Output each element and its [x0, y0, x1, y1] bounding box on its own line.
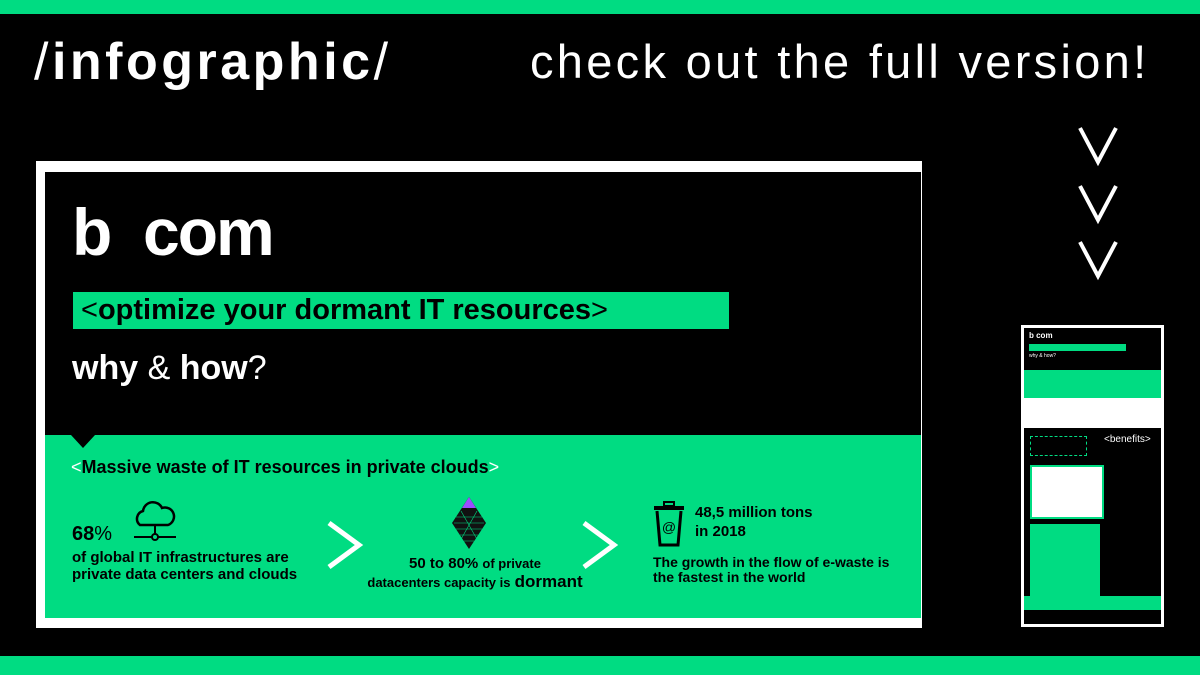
arrow 1 — [328, 521, 364, 569]
thumbnail: full infographic preview: why & how? — [1029, 353, 1056, 359]
heading: /infographic/: /infographic/ — [34, 33, 392, 91]
stat 3: e-waste: in 2018 — [695, 523, 746, 540]
stat 2: 50 to 80%: datacenters capacity is dormant — [367, 572, 583, 591]
thumbnail: full infographic preview — [1021, 325, 1164, 627]
icon: down chevrons — [1078, 127, 1118, 280]
arrow 2 — [582, 521, 618, 569]
stat 3: e-waste — [653, 501, 889, 585]
thumbnail: full infographic preview: b com — [1029, 331, 1053, 340]
panel: green stats section — [45, 435, 921, 618]
panel: infographic preview card — [36, 161, 922, 628]
title banner: <optimize your dormant IT resources> — [81, 294, 608, 326]
bottom green bar — [0, 656, 1200, 675]
icon: trash bin: @ — [662, 519, 676, 535]
heading: check out the full version: check out the full version! — [530, 35, 1149, 88]
thumbnail: full infographic preview: <benefits> — [1104, 434, 1151, 445]
stat 2: 50 to 80%: 50 to 80% of private — [409, 555, 541, 572]
section heading: <Massive waste of IT resources in private clouds> — [71, 457, 499, 477]
title banner — [73, 292, 729, 329]
stat 3: e-waste: 48,5 million tons — [695, 504, 813, 521]
icon: trash bin — [654, 501, 684, 546]
panel: black header — [45, 172, 921, 435]
top green bar — [0, 0, 1200, 14]
stat 3: e-waste: The growth in the flow of e-waste is the fastest in the world — [653, 554, 889, 585]
stat 1: 68%: of global IT infrastructures are private data centers and clouds — [72, 549, 297, 583]
icon: cloud network — [134, 501, 176, 541]
logo: b<>com: b com — [72, 195, 273, 269]
stat 1: 68% — [72, 501, 297, 583]
stat 1: 68%: 68% — [72, 523, 112, 545]
pointer triangle — [71, 435, 95, 448]
stat 2: 50 to 80% — [367, 497, 583, 591]
icon: diamond grid — [452, 497, 486, 549]
subtitle: why & how: why & how? — [72, 349, 267, 387]
